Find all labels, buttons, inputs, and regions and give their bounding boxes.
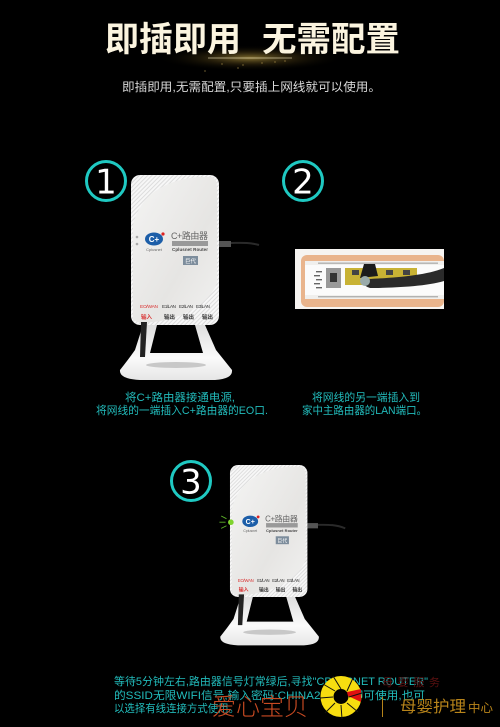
router: step 3: 输出: [292, 587, 302, 594]
faint red text: 母婴服务: [382, 676, 440, 689]
watermark: 中心: [468, 700, 493, 715]
router: step 1: Cplusnet: [146, 247, 163, 252]
power cable: [307, 525, 345, 528]
divider: [382, 697, 383, 717]
caption: step 3: 的SSID无限WIFI信号,输入密码:CHINA2012后即可使用,也可: [114, 688, 425, 702]
router: step 3: Cplusnet: [243, 529, 257, 533]
router: step 1: [120, 175, 259, 380]
caption: step 1: 将C+路由器接通电源,: [125, 390, 235, 404]
router body: [131, 175, 219, 325]
title: 无需配置: [262, 21, 400, 59]
title: 即插即用: [105, 21, 241, 59]
router: step 3: E1/LAN: [257, 578, 270, 583]
caption: step 2: 将网线的另一端插入到: [312, 390, 420, 404]
router: step 3: E2/LAN: [272, 578, 285, 583]
caption: step 3: 以选择有线连接方式使用。: [114, 701, 239, 715]
caption: step 1: 将网线的一端插入C+路由器的EO口.: [96, 403, 268, 417]
router: step 1: E1/LAN: [162, 304, 177, 310]
caption: step 3: 等待5分钟左右,路由器信号灯常绿后,寻找"CPLUSNET ROUTER": [114, 674, 428, 688]
caption: step 2: 家中主路由器的LAN端口。: [302, 403, 427, 417]
router: step 3: C+: [246, 519, 255, 526]
router: step 3: [219, 465, 345, 645]
sunburst logo: [320, 676, 362, 719]
org name: 母婴护理: [400, 698, 466, 716]
port labels: EO/WAN: [238, 578, 254, 583]
step 2 number badge: 2: [292, 162, 314, 202]
stand: [120, 325, 232, 380]
router: step 1: 输入: [141, 313, 153, 321]
router: step 3: 输出: [276, 587, 286, 594]
network cable: [238, 594, 244, 625]
router: step 1: 输出: [183, 313, 194, 321]
watermark name: 爱心宝贝: [212, 694, 308, 721]
router: step 1: E2/LAN: [179, 304, 194, 310]
router: step 1: C+: [149, 235, 160, 244]
caption: step 2: [302, 390, 427, 417]
step 1 number badge: 1: [95, 162, 117, 202]
photo: router back panel with LAN cable: [295, 249, 444, 309]
router: step 1: E3/LAN: [196, 304, 211, 310]
router body: [230, 465, 307, 597]
router: step 3: 巨代: [278, 537, 287, 544]
product name: C+路由器: [265, 513, 298, 523]
router: step 3: 输出: [259, 587, 269, 594]
stand: [220, 597, 319, 645]
router: step 1: 输出: [202, 313, 213, 321]
step 2 number badge: [284, 162, 322, 202]
step 1 number badge: [86, 162, 126, 202]
router: step 1: 巨代: [185, 257, 196, 265]
subtitle: 即插即用,无需配置,只要插上网线就可以使用。: [122, 79, 381, 94]
router: step 3: 输入: [239, 587, 249, 594]
router: step 3: E3/LAN: [287, 578, 299, 583]
router: step 1: 输出: [164, 313, 175, 321]
green LED lit: [219, 516, 234, 528]
caption: step 3: [114, 674, 428, 715]
caption: step 1: [96, 390, 268, 417]
power cable: [219, 243, 259, 245]
product name: C+路由器: [171, 230, 208, 241]
step 3 number badge: 3: [180, 462, 202, 502]
watermark: [212, 676, 493, 721]
router: step 1: Cplusnet Router: [172, 247, 208, 252]
router: step 3: Cplusnet Router: [266, 528, 298, 533]
logo: [242, 516, 258, 527]
logo: [145, 232, 163, 246]
title: [105, 21, 400, 72]
network cable: [140, 322, 147, 357]
LEDs: [136, 236, 138, 238]
step 3 number badge: [172, 462, 210, 502]
port labels: EO/WAN: [140, 304, 159, 310]
